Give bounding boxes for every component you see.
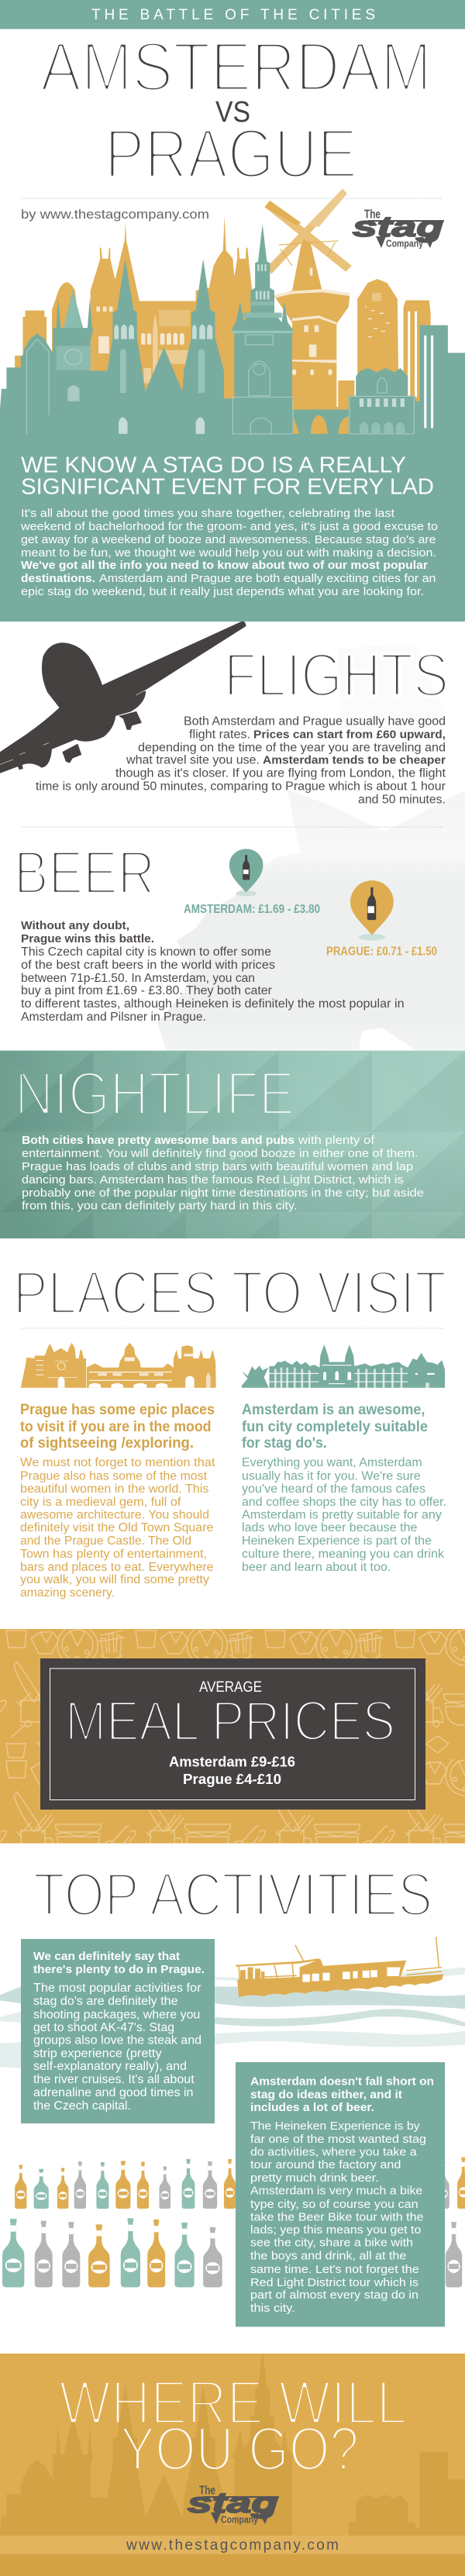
main title — [40, 29, 432, 193]
heading: meal prices: MEAL PRICES — [65, 1689, 395, 1752]
illustration: beer bottles — [2, 2158, 465, 2288]
main title: VS — [215, 96, 250, 129]
flights text: and 50 minutes. — [358, 793, 446, 806]
panel: meal prices — [0, 1629, 465, 1844]
prague text: beautiful women in the world. This — [20, 1483, 209, 1496]
callout: prague activities: groups also love the steak and — [33, 2034, 202, 2047]
callout: amsterdam activities: stag do ideas either, and it — [250, 2088, 402, 2102]
icon: prague skyline — [21, 1342, 216, 1388]
amsterdam heading: for stag do's. — [242, 1434, 327, 1452]
callout: prague activities: We can definitely say that — [33, 1950, 180, 1963]
column: prague — [20, 1401, 215, 1600]
callout: amsterdam activities: this city. — [250, 2302, 295, 2315]
intro text: It's all about the good times you share together, celebrating the last — [21, 507, 395, 520]
skyline: windmill sails — [264, 189, 352, 274]
panel: where will you go footer — [0, 2350, 465, 2576]
prague heading: to visit if you are in the mood — [20, 1418, 211, 1435]
flights text: time is only around 50 minutes, comparing to Prague which is about 1 hour — [36, 780, 446, 793]
nightlife text: dancing bars. Amsterdam has the famous Red Light District, which is — [22, 1173, 403, 1186]
nightlife text — [22, 1134, 424, 1212]
prague text: Prague also has some of the most — [20, 1469, 208, 1483]
column: amsterdam — [242, 1401, 446, 1574]
beer text: between 71p-£1.50. In Amsterdam, you can — [21, 972, 255, 985]
skyline: teal details — [26, 264, 433, 434]
nightlife text: probably one of the popular night time destinations in the city; but aside — [22, 1186, 424, 1200]
callout: amsterdam activities: Amsterdam doesn't fall short on — [250, 2075, 434, 2088]
icon: stag company logo: Company — [386, 237, 424, 250]
icon: amsterdam skyline — [242, 1345, 445, 1388]
callout: amsterdam activities: type city, so of course you can — [250, 2198, 418, 2211]
prague text: We must not forget to mention that — [20, 1456, 215, 1469]
illustration: boat — [235, 1937, 443, 1997]
beer text: to different tastes, although Heineken is definitely the most popular in — [21, 997, 405, 1011]
flights text — [36, 715, 446, 806]
beer text: of the best craft beers in the world with prices — [21, 959, 275, 972]
panel: nightlife — [0, 1051, 465, 1238]
callout: prague activities: strip experience (pretty — [33, 2047, 162, 2060]
nightlife text: Prague has loads of clubs and strip bars with beautiful women and lap — [22, 1160, 413, 1173]
callout: prague activities: self-explanatory really), and — [33, 2060, 187, 2073]
callout: amsterdam activities: The Heineken Experience is by — [250, 2120, 420, 2133]
flights text: Amsterdam tends to be cheaper — [263, 753, 446, 766]
footer skyline silhouette — [0, 2354, 465, 2576]
title bar: THE BATTLE OF THE CITIES — [91, 7, 375, 23]
panel: intro background — [0, 430, 465, 622]
beer text: Prague wins this battle. — [21, 932, 154, 945]
prague text: awesome architecture. You should — [20, 1508, 209, 1521]
amsterdam text: usually has it for you. We're sure — [242, 1469, 421, 1483]
intro heading: SIGNIFICANT EVENT FOR EVERY LAD — [21, 474, 434, 499]
meal prices values: Amsterdam £9-£16 — [169, 1755, 295, 1770]
callout: prague activities: the Czech capital. — [33, 2099, 131, 2113]
pin: amsterdam — [229, 849, 263, 896]
prague text: city is a medieval gem, full of — [20, 1496, 181, 1509]
icon: footer logo: Company — [221, 2514, 259, 2525]
illustration: city skyline — [0, 189, 465, 498]
callout: prague activities: there's plenty to do in Prague. — [33, 1963, 205, 1976]
flights text: what travel site you use. — [126, 753, 260, 766]
beer price labels: AMSTERDAM: £1.69 - £3.80 — [184, 903, 320, 916]
prague text: definitely visit the Old Town Square — [20, 1521, 214, 1534]
callout: prague activities: The most popular activities for — [33, 1982, 202, 1995]
skyline: building details — [96, 268, 417, 397]
intro text: epic stag do weekend, but it really just depends what you are looking for. — [21, 585, 424, 598]
prague heading — [20, 1401, 215, 1452]
amsterdam text — [242, 1456, 446, 1574]
meal prices values — [169, 1755, 295, 1787]
beer text: This Czech capital city is known to offer some — [21, 945, 271, 959]
average label: AVERAGE — [199, 1679, 262, 1696]
icon: stag company logo: stag — [353, 211, 443, 243]
icon: stag company logo: The — [364, 208, 381, 222]
skyline: teal Prague buildings — [0, 224, 465, 498]
callout: prague activities — [21, 1939, 215, 2123]
amsterdam text: Heineken Experience is part of the — [242, 1534, 432, 1548]
illustration: river waves — [0, 1968, 465, 2068]
byline: by www.thestagcompany.com — [21, 207, 209, 222]
beer text — [21, 919, 405, 1024]
heading: where will you go — [61, 2382, 404, 2469]
callout: prague activities: the river cruises. It's all about — [33, 2073, 195, 2086]
intro text: meant to be fun, we thought we would help you out with making a decision. — [21, 546, 436, 560]
flights text: flight rates. — [189, 728, 250, 741]
footer url band: www.thestagcompany.com — [126, 2537, 339, 2554]
callout: amsterdam activities: includes a lot of beer. — [250, 2101, 374, 2114]
intro heading: WE KNOW A STAG DO IS A REALLY — [21, 453, 406, 478]
meal prices values: Prague £4-£10 — [183, 1772, 281, 1787]
beer text: buy a pint from £1.69 - £3.80. They both cater — [21, 984, 272, 997]
callout: prague activities: get to shoot AK-47's. Stag — [33, 2021, 174, 2034]
amsterdam text: you've heard of the famous cafes — [242, 1483, 425, 1496]
nightlife text: with plenty of — [298, 1134, 375, 1147]
callout: amsterdam activities: the boys and drink, all at the — [250, 2250, 406, 2263]
nightlife text: entertainment. You will definitely find good booze in either one of them. — [22, 1147, 418, 1160]
callout: amsterdam activities: pretty much drink beer. — [250, 2171, 379, 2185]
callout: amsterdam activities: far one of the most wanted stag — [250, 2133, 426, 2146]
callout: amsterdam activities: take the Beer Bike tour with the — [250, 2210, 423, 2224]
callout: prague activities: stag do's are definitely the — [33, 1995, 178, 2008]
intro text: Amsterdam and Prague are both equally exciting cities for an — [99, 572, 436, 585]
flights text: Prices can start from £60 upward, — [253, 728, 446, 741]
amsterdam text: lads who love beer because the — [242, 1521, 417, 1534]
icon: footer logo: stag — [188, 2487, 278, 2519]
amsterdam heading: fun city completely suitable — [242, 1418, 428, 1435]
callout: amsterdam activities: same time. Let's not forget the — [250, 2263, 419, 2276]
flights text: Both Amsterdam and Prague usually have good — [184, 715, 446, 728]
beer price labels — [184, 903, 437, 958]
callout: amsterdam activities: Amsterdam is very much a bike — [250, 2185, 422, 2198]
prague text: and the Prague Castle. The Old — [20, 1534, 191, 1548]
callout: amsterdam activities: part of almost every stag do in — [250, 2288, 418, 2302]
intro text: get away for a weekend of booze and awesomeness. Because stag do's are — [21, 533, 436, 546]
amsterdam text: and coffee shops the city has to offer. — [242, 1496, 446, 1509]
nightlife text: from this, you can definitely party hard in this city. — [22, 1199, 298, 1212]
prague text: bars and places to eat. Everywhere — [20, 1561, 214, 1574]
map background — [157, 643, 465, 1050]
prague text — [20, 1456, 215, 1600]
prague heading: Prague has some epic places — [20, 1401, 215, 1418]
amsterdam text: Amsterdam is pretty suitable for any — [242, 1508, 442, 1521]
beer text: Without any doubt, — [21, 919, 129, 932]
callout: amsterdam activities: see the city, share a bike with — [250, 2237, 413, 2250]
flights text: depending on the time of the year you are traveling and — [138, 741, 446, 754]
prague text: amazing scenery. — [20, 1586, 115, 1600]
intro text: weekend of bachelorhood for the groom- and yes, it's just a good excuse to — [20, 520, 438, 533]
amsterdam text: beer and learn about it too. — [242, 1561, 391, 1574]
icon: footer logo — [188, 2485, 279, 2525]
heading: where will you go: WHERE WILL — [59, 2368, 407, 2437]
callout: amsterdam activities — [236, 2062, 445, 2326]
amsterdam text: culture there, meaning you can drink — [242, 1548, 444, 1561]
map pins with bottles — [229, 849, 394, 941]
heading: where will you go: YOU GO? — [120, 2414, 359, 2483]
main title: PRAGUE — [105, 115, 357, 193]
beer price labels: PRAGUE: £0.71 - £1.50 — [326, 945, 437, 958]
flights text: though as it's closer. If you are flying from London, the flight — [115, 767, 446, 780]
callout: amsterdam activities: Red Light District tour which is — [250, 2276, 418, 2289]
heading: beer: BEER — [14, 839, 155, 907]
callout: prague activities: shooting packages, where you — [33, 2008, 200, 2021]
intro text: We've got all the info you need to know about two of our most popular — [21, 559, 428, 572]
callout: amsterdam activities: lads; yep this means you get to — [250, 2223, 421, 2237]
amsterdam heading — [242, 1401, 428, 1452]
skyline: gold Amsterdam buildings — [0, 216, 431, 435]
prague text: Town has plenty of entertainment, — [20, 1548, 207, 1561]
title bar — [0, 0, 465, 29]
prague heading: of sightseeing /exploring. — [20, 1434, 194, 1452]
prague text: you walk, you will find some pretty — [20, 1573, 209, 1586]
intro text: destinations. — [21, 572, 95, 585]
callout: amsterdam activities: do activities, where you take a — [250, 2146, 417, 2159]
intro heading — [21, 453, 434, 499]
nightlife text: Both cities have pretty awesome bars and pubs — [22, 1134, 294, 1147]
amsterdam text: Everything you want, Amsterdam — [242, 1456, 422, 1469]
heading: nightlife: NIGHTLIFE — [15, 1059, 294, 1128]
intro text — [20, 507, 438, 598]
callout: amsterdam activities: tour around the factory and — [250, 2158, 401, 2171]
callout: prague activities: adrenaline and good times in — [33, 2086, 194, 2099]
icon: airplane — [0, 622, 246, 773]
icon: stag company logo — [353, 208, 444, 250]
footer url band — [0, 2536, 465, 2554]
beer text: Amsterdam and Pilsner in Prague. — [21, 1011, 206, 1024]
pin: prague — [350, 880, 394, 941]
amsterdam heading: Amsterdam is an awesome, — [242, 1401, 425, 1418]
icon: footer logo: The — [199, 2485, 215, 2497]
